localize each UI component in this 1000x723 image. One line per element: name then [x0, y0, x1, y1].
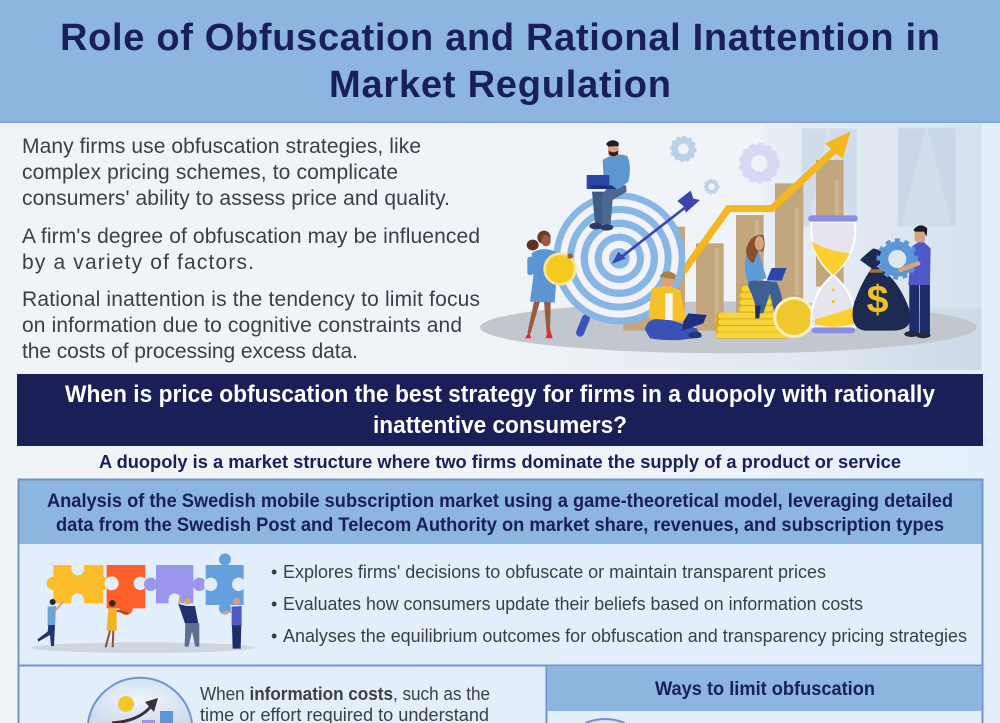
intro text block: Many firms use obfuscation strategies, like	[22, 135, 421, 158]
methodology heading: Analysis of the Swedish mobile subscription market using a game-theoretical model, leveraging detailed	[47, 490, 953, 512]
purple piece	[144, 565, 206, 605]
panel: ways to limit obfuscation: Ways to limit obfuscation	[655, 679, 875, 700]
person 4	[223, 598, 242, 649]
woman with coin	[525, 231, 577, 338]
icon: limit obfuscation circle	[585, 719, 625, 723]
hourglass	[808, 215, 858, 333]
title banner	[0, 0, 1000, 123]
puzzle illustration	[32, 553, 255, 653]
methodology bullets	[271, 562, 967, 646]
methodology bullets: Explores firms' decisions to obfuscate or maintain transparent prices	[283, 562, 826, 582]
finding text: information costs	[200, 684, 490, 723]
big coin	[773, 297, 815, 338]
finding text: information costs: When information costs, such as the	[200, 684, 490, 704]
methodology bullets: •	[271, 594, 277, 614]
person on target	[587, 140, 630, 231]
arrow in target	[612, 191, 700, 264]
methodology bullets: •	[271, 562, 277, 582]
bar chart columns	[623, 160, 844, 331]
money bag	[853, 248, 910, 331]
money bag: $	[867, 278, 889, 322]
target stand	[580, 318, 586, 333]
icon: information costs growth	[88, 678, 192, 723]
intro text block: A firm's degree of obfuscation may be influenced	[22, 225, 480, 248]
yellow piece	[47, 563, 109, 605]
hero illustration: team, target, growth chart, money	[480, 123, 982, 370]
panel: methodology	[18, 479, 983, 723]
methodology bullets: Evaluates how consumers update their beliefs based on information costs	[283, 594, 863, 614]
blue piece	[204, 553, 245, 614]
growth arrow	[683, 131, 851, 272]
intro text block: consumers' ability to assess price and quality.	[22, 187, 450, 210]
research question banner: When is price obfuscation the best strategy for firms in a duopoly with rationally	[65, 381, 936, 408]
intro text block: the costs of processing excess data.	[22, 340, 358, 363]
intro text block: complex pricing schemes, to complicate	[22, 161, 398, 184]
person 3	[178, 595, 199, 647]
methodology heading	[18, 479, 983, 544]
methodology bullets: Analyses the equilibrium outcomes for obfuscation and transparency pricing strategies	[283, 626, 967, 646]
panel borders	[18, 480, 983, 723]
person 1	[37, 599, 63, 646]
research question banner	[17, 374, 983, 446]
title banner: Market Regulation	[329, 64, 671, 106]
intro text block: on information due to cognitive constraints and	[22, 314, 462, 337]
orange piece	[105, 565, 147, 615]
man sitting with laptop	[645, 271, 707, 340]
man holding gear	[878, 225, 931, 338]
methodology bullets: •	[271, 626, 277, 646]
coin stacks	[716, 286, 788, 339]
person 2	[106, 600, 128, 647]
duopoly definition: A duopoly is a market structure where two firms dominate the supply of a product or service	[99, 451, 901, 472]
intro text block: Rational inattention is the tendency to limit focus	[22, 288, 480, 311]
gears background	[671, 137, 779, 194]
woman on coins with laptop	[745, 235, 788, 320]
title banner: Role of Obfuscation and Rational Inattention in	[60, 17, 940, 59]
target	[553, 192, 685, 324]
research question banner: inattentive consumers?	[373, 412, 627, 439]
intro text block	[22, 135, 480, 363]
panel: ways to limit obfuscation	[547, 666, 982, 723]
methodology heading: data from the Swedish Post and Telecom Authority on market share, revenues, and subscription types	[56, 514, 944, 536]
intro text block: by a variety of factors.	[22, 251, 254, 274]
